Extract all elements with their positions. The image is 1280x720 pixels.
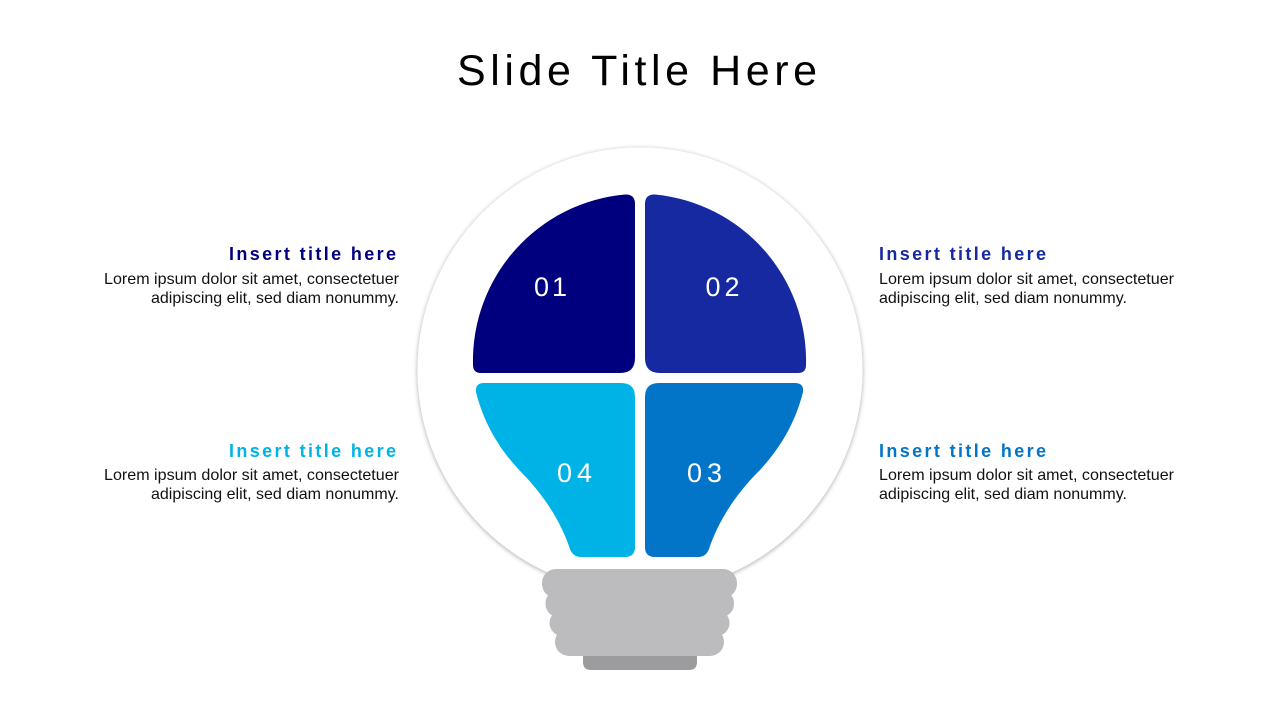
text block: top left: Insert title here xyxy=(229,244,396,264)
text block: top left: adipiscing elit, sed diam nonummy. xyxy=(151,290,399,307)
text block: top right: Lorem ipsum dolor sit amet, consectetuer xyxy=(879,271,1175,288)
icon: light bulb xyxy=(418,148,862,670)
segment 04: 04 xyxy=(557,458,592,488)
segment 03 xyxy=(645,383,803,557)
text block: top right: Insert title here xyxy=(879,244,1046,264)
bulb base cap xyxy=(583,650,697,670)
text block: top left: Lorem ipsum dolor sit amet, consectetuer xyxy=(104,271,400,288)
title: Slide Title Here xyxy=(457,47,817,95)
text block: bottom left: Insert title here xyxy=(229,441,396,461)
segment 01 xyxy=(473,194,635,373)
segment 03: 03 xyxy=(687,458,722,488)
segment 01: 01 xyxy=(534,272,567,302)
text block: bottom left: adipiscing elit, sed diam nonummy. xyxy=(151,486,399,503)
text block: bottom left xyxy=(104,441,400,503)
text block: top right xyxy=(879,244,1175,307)
text block: bottom right xyxy=(879,441,1175,503)
segment 02: 02 xyxy=(706,272,740,302)
segment 02 xyxy=(645,194,806,373)
bulb glass circle xyxy=(418,148,862,592)
text block: bottom right: adipiscing elit, sed diam nonummy. xyxy=(879,486,1127,503)
text block: bottom right: Insert title here xyxy=(879,441,1046,461)
text block: bottom right: Lorem ipsum dolor sit amet, consectetuer xyxy=(879,467,1175,484)
text block: top left xyxy=(104,244,400,307)
text block: top right: adipiscing elit, sed diam nonummy. xyxy=(879,290,1127,307)
segment 04 xyxy=(476,383,635,557)
text block: bottom left: Lorem ipsum dolor sit amet, consectetuer xyxy=(104,467,400,484)
bulb screw base xyxy=(542,569,737,656)
